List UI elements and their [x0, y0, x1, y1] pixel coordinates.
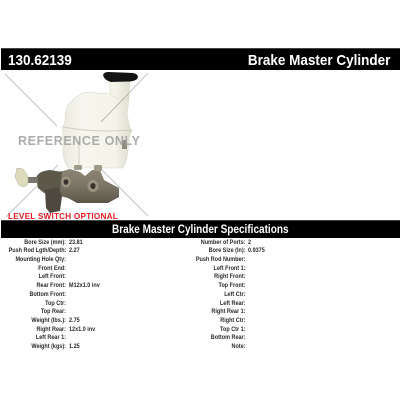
watermark cross lines: [5, 73, 148, 217]
header bar: [1, 48, 400, 70]
specifications table: Push Rod Number:: [196, 256, 246, 263]
specifications table: Bore Size (mm):: [24, 238, 66, 246]
specifications table: Right Ctr:: [220, 317, 246, 324]
specifications table: Number of Ports:: [201, 238, 246, 246]
specifications table: 2.75: [68, 317, 79, 324]
watermark: reference only: REFERENCE ONLY: [18, 134, 141, 148]
specifications table: Left Front 1:: [214, 265, 246, 272]
specifications table: Right Rear 1:: [211, 308, 246, 315]
product photo: brake master cylinder: [4, 72, 148, 218]
specifications table: Left Rear 1:: [36, 334, 66, 341]
push rod end cap: [15, 168, 28, 187]
watermark line over tank: [101, 93, 129, 122]
reservoir tank: [62, 80, 132, 168]
specifications table: Top Rear:: [41, 308, 66, 315]
specifications table: Right Rear:: [36, 326, 66, 333]
specifications table: 2.27: [68, 247, 79, 254]
specifications table: M12x1.0 inv: [68, 282, 99, 289]
specifications table: Top Ctr:: [45, 300, 66, 306]
specifications table: Left Front:: [39, 273, 66, 280]
cylinder body: [36, 165, 119, 213]
specifications table: Front End:: [38, 265, 66, 272]
specifications table: 2: [248, 238, 251, 246]
specifications table: 23.81: [68, 238, 82, 246]
specifications table: Top Front:: [219, 282, 246, 289]
product title: Brake Master Cylinder: [248, 52, 390, 69]
specifications table: 0.9375: [248, 247, 265, 254]
specifications table: Rear Front:: [36, 282, 66, 289]
specifications table: Weight (kgs):: [31, 343, 66, 350]
specifications table: Mounting Hole Qty:: [15, 256, 66, 263]
specifications table: Bottom Front:: [29, 291, 66, 298]
specifications table: Bottom Rear:: [211, 334, 246, 341]
specifications bar: [1, 220, 400, 238]
part number: 130.62139: [8, 52, 72, 69]
reservoir cap: [103, 72, 138, 82]
push rod: [27, 177, 38, 183]
specifications table: Top Ctr 1:: [220, 326, 246, 333]
specifications table: Left Ctr:: [224, 291, 246, 298]
red note: level switch optional: LEVEL SWITCH OPTIONAL: [8, 212, 118, 221]
specifications table: Right Front:: [214, 273, 246, 280]
specifications table: Note:: [231, 343, 246, 350]
specifications table: Bore Size (In):: [209, 247, 246, 254]
specifications title: Brake Master Cylinder Specifications: [112, 222, 289, 236]
specifications table: Push Rod Lgth/Depth:: [9, 247, 66, 254]
specifications table: Weight (lbs.):: [31, 317, 66, 324]
specifications table: 12x1.0 inv: [68, 326, 95, 333]
specifications table: 1.25: [68, 343, 79, 350]
specifications table: Left Rear:: [220, 300, 246, 306]
